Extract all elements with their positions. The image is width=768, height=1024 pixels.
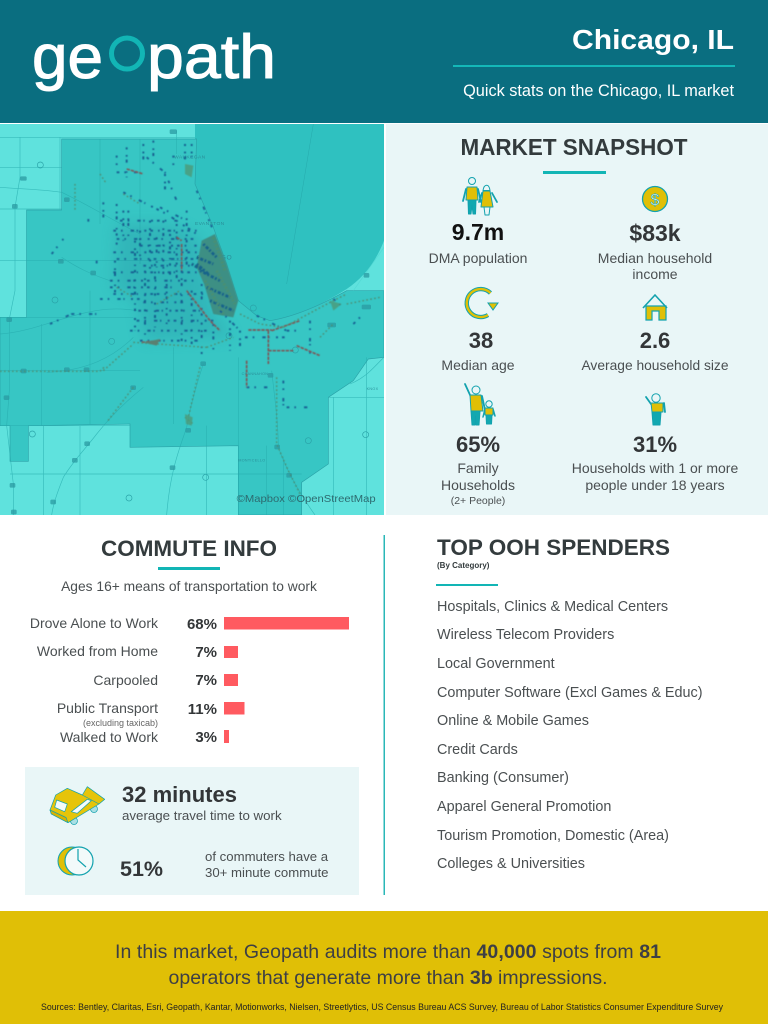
stat: median household income: Median household [598, 250, 712, 266]
stat: average household size: Average household size [581, 358, 729, 373]
commute heading: COMMUTE INFO [101, 536, 277, 561]
icon: dollar coin: $ [651, 192, 660, 209]
stat: median age: Median age [441, 357, 515, 373]
logo: geopath: ge [32, 23, 103, 92]
icon: circular arrow [467, 289, 498, 317]
stat: family households: (2+ People) [451, 495, 505, 507]
stat: median age: 38 [469, 328, 493, 353]
icon: house [643, 295, 667, 320]
stat: family households: Households [441, 477, 515, 493]
footer summary [115, 941, 661, 989]
spenders list: Colleges & Universities [437, 856, 585, 872]
icon: dollar coin [642, 186, 668, 212]
spenders subheading: (By Category) [437, 561, 490, 570]
stat: family households: 65% [456, 432, 500, 457]
icon: couple [463, 178, 497, 215]
map attribution: ©Mapbox ©OpenStreetMap [237, 494, 376, 505]
icon: child [646, 394, 665, 425]
stat: average household size: 2.6 [640, 328, 670, 353]
spenders heading: TOP OOH SPENDERS [437, 535, 670, 560]
stat: households with children [572, 432, 738, 493]
soft density patch [113, 224, 233, 341]
stat: average household size [581, 328, 729, 373]
stat: 32 minutes: average travel time to work [122, 808, 282, 823]
stat: 32 minutes: 32 minutes [122, 782, 237, 807]
bar chart: means of transportation: (excluding taxicab) [83, 718, 158, 728]
logo: geopath [32, 23, 276, 92]
icon: clock [58, 847, 93, 875]
spenders list [437, 599, 703, 872]
icon: car [50, 787, 105, 824]
dense city core [197, 234, 238, 317]
stat: DMA population: DMA population [429, 250, 527, 266]
stat: 51 percent: 30+ minute commute [205, 865, 329, 880]
spenders list: Tourism Promotion, Domestic (Area) [437, 828, 669, 844]
stat: median household income: income [632, 266, 678, 282]
header subtitle: Quick stats on the Chicago, IL market [463, 82, 734, 100]
icon: parent and child [465, 384, 495, 425]
lake [195, 124, 384, 321]
footer summary: In this market, Geopath audits more than 40,000 spots from 81 [115, 941, 661, 963]
bar chart: means of transportation: 11% [188, 701, 217, 718]
roadway dots: green [0, 174, 380, 494]
bar chart: means of transportation: Worked from Home [37, 643, 158, 659]
spenders list: Hospitals, Clinics & Medical Centers [437, 599, 668, 615]
stat: family households: Family [457, 460, 499, 476]
stat: median household income: $83k [629, 220, 681, 246]
header band [0, 0, 768, 123]
road network [0, 124, 384, 515]
stat: DMA population [429, 219, 527, 266]
map labels: EVANSTON [195, 221, 225, 227]
map labels: MONTICELLO [238, 458, 265, 462]
blue dots: vertical streets [103, 141, 240, 354]
panel: top OOH spenders [436, 535, 703, 872]
blue dots: horizontal streets [50, 157, 363, 411]
footer band [0, 911, 768, 1024]
stat: median age [441, 328, 515, 373]
bar chart: means of transportation: 7% [195, 672, 217, 689]
stat: DMA population: 9.7m [452, 219, 504, 245]
panel: travel time [25, 767, 359, 895]
bar chart: means of transportation: Carpooled [93, 672, 158, 688]
market snapshot heading: MARKET SNAPSHOT [460, 134, 688, 160]
stat: median household income [598, 220, 712, 282]
bar chart: means of transportation: 68% [187, 616, 217, 633]
footer summary: operators that generate more than 3b impressions. [168, 967, 608, 989]
stat: 51 percent [120, 849, 329, 881]
sources: Sources: Bentley, Claritas, Esri, Geopath, Kantar, Motionworks, Nielsen, Streetlytics, US Census Bureau ACS Survey, Bureau of Labor Statistics Consumer Expenditure Survey [41, 1002, 724, 1012]
bar chart: means of transportation: Public Transport [57, 700, 158, 716]
bar chart: means of transportation: 7% [195, 644, 217, 661]
stat: 32 minutes [122, 782, 282, 823]
map labels [174, 155, 379, 462]
spenders list: Computer Software (Excl Games & Educ) [437, 685, 703, 701]
commute subtitle: Ages 16+ means of transportation to work [61, 579, 317, 594]
stat: households with children: 31% [633, 432, 677, 457]
roadway dots: brown [127, 169, 320, 387]
bar chart: means of transportation [30, 615, 349, 746]
stat: family households [441, 432, 515, 507]
stat: 51 percent: 51% [120, 857, 163, 881]
panel: commute info [25, 536, 359, 895]
market area [0, 139, 384, 515]
stat: 51 percent: of commuters have a [205, 849, 329, 864]
map labels: KNOX [367, 387, 379, 391]
logo: geopath: path [147, 23, 276, 92]
map labels: WAUKEGAN [174, 155, 206, 161]
header title: Chicago, IL [572, 24, 734, 55]
map labels: CHANNAHON [242, 372, 268, 376]
spenders list: Banking (Consumer) [437, 770, 569, 786]
spenders list: Local Government [437, 656, 555, 672]
stat: households with children: Households with 1 or more [572, 460, 738, 476]
spenders list: Wireless Telecom Providers [437, 627, 614, 643]
bar chart: means of transportation: Walked to Work [60, 729, 159, 745]
map labels: CHICAGO [197, 254, 232, 261]
map panel [0, 124, 384, 515]
out-of-home inventory dots [0, 141, 380, 494]
bar chart: means of transportation: 3% [195, 729, 217, 746]
panel: market snapshot [386, 124, 768, 515]
spenders list: Credit Cards [437, 742, 518, 758]
spenders list: Apparel General Promotion [437, 799, 611, 815]
bar chart: means of transportation: Drove Alone to Work [30, 615, 159, 631]
highway shields [4, 129, 371, 514]
stat: households with children: people under 18 years [585, 477, 725, 493]
spenders list: Online & Mobile Games [437, 713, 589, 729]
